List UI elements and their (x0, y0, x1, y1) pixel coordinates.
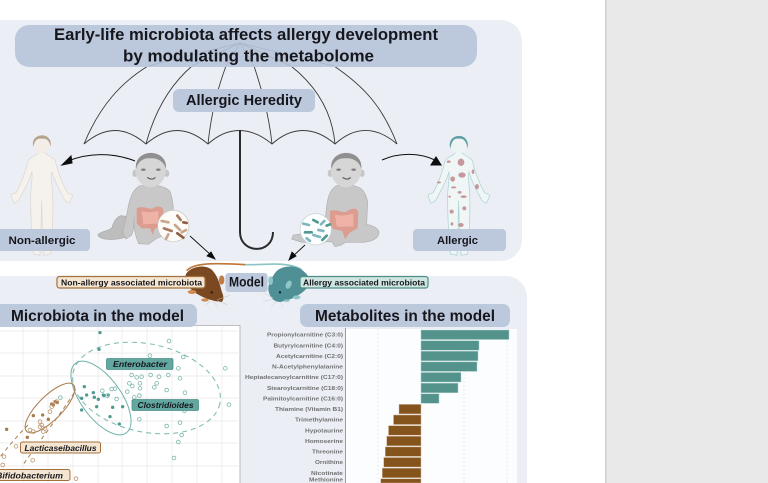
bar chart: metabolites: Heptadecanoylcarnitine (C17:0) (245, 375, 343, 381)
title: Early-life microbiota affects allergy development (54, 25, 438, 44)
bar chart: metabolites: Hypotaurine (305, 428, 344, 434)
title (15, 25, 477, 67)
bar chart: metabolites (245, 328, 517, 483)
icon: left baby (98, 153, 189, 244)
label: allergy associated microbiota: Allergy associated microbiota (303, 278, 425, 288)
bar chart: metabolites: Threonine (312, 450, 344, 456)
panel: allergic heredity (0, 20, 522, 261)
label: model: Model (229, 274, 264, 290)
bar chart: metabolites: Palmitoylcarnitine (C16:0) (263, 396, 343, 402)
arrow: right baby to mouse (289, 245, 305, 260)
label: non-allergy associated microbiota: Non-allergy associated microbiota (61, 278, 202, 288)
label: Lacticaseibacillus: Lacticaseibacillus (24, 443, 97, 453)
label: non-allergic: Non-allergic (8, 235, 76, 247)
arrow: baby to allergic (382, 154, 441, 165)
bar chart: metabolites: Thiamine (Vitamin B1) (275, 407, 343, 413)
label: Enterobacter: Enterobacter (113, 359, 168, 369)
icon: brown mouse (185, 264, 245, 306)
heading: microbiota in the model: Microbiota in the model (11, 308, 184, 325)
bar chart: metabolites: Acetylcarnitine (C2:0) (276, 354, 343, 360)
heading: microbiota in the model (0, 304, 197, 327)
arrow: baby to non-allergic (62, 155, 135, 165)
heading: metabolites in the model (300, 304, 510, 327)
bar chart: metabolites: Homoserine (305, 439, 344, 445)
label: Clostridioides: Clostridioides (138, 400, 194, 410)
label: non-allergic (0, 229, 90, 251)
grey side area (605, 0, 768, 483)
bar chart: metabolites: Stearoylcarnitine (C18:0) (267, 386, 343, 392)
arrow: left baby to mouse (190, 236, 215, 259)
icon: allergic child (428, 134, 490, 255)
heading: metabolites in the model: Metabolites in the model (315, 308, 495, 325)
bar chart: metabolites: Propionylcarnitine (C3:0) (267, 333, 343, 339)
heading: allergic heredity (173, 89, 315, 112)
icon: right baby (292, 153, 379, 247)
bar chart: metabolites: Butyrylcarnitine (C4:0) (274, 343, 343, 349)
label: allergic: Allergic (437, 235, 478, 247)
label: allergic (413, 229, 506, 251)
icon: non-allergic child (11, 134, 73, 255)
bar chart: metabolites: Trimethylamine (295, 418, 344, 424)
scatter plot: microbiota (0, 325, 240, 483)
panel: model (0, 276, 527, 483)
title: by modulating the metabolome (123, 46, 374, 66)
bar chart: metabolites: N-Acetylphenylalanine (272, 365, 344, 371)
heading: allergic heredity: Allergic Heredity (186, 93, 302, 109)
icon: teal mouse (245, 264, 310, 307)
icon: umbrella (84, 66, 397, 249)
bar chart: metabolites: Ornithine (315, 460, 344, 466)
bar chart: metabolites: Nicotinate (311, 471, 344, 477)
